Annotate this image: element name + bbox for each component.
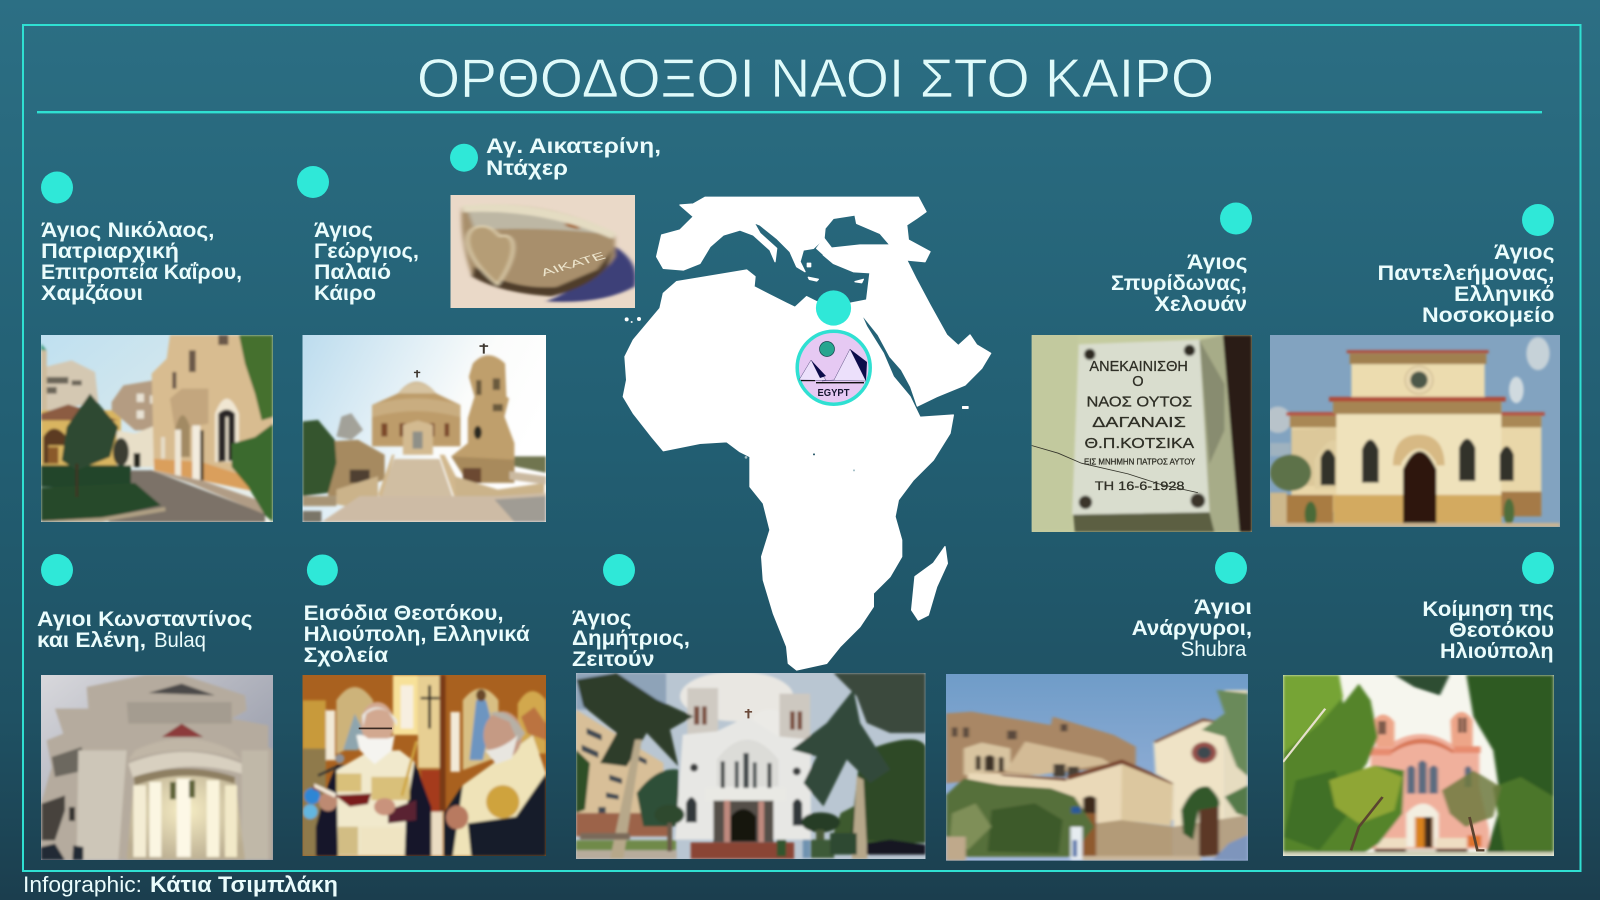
label: Agia Aikaterini: Ντάχερ	[486, 157, 568, 180]
icon: Egypt badge: EGYPT	[818, 388, 850, 399]
label: Koimisi Theotokou: Θεοτόκου	[1449, 619, 1554, 642]
label: Agios Spyridon	[1111, 251, 1248, 316]
label: Agios Georgios: Κάιρο	[314, 282, 376, 305]
label: Agios Nikolaos	[41, 219, 242, 305]
footer credit: Κάτια Τσιμπλάκη	[150, 872, 338, 897]
label: Koimisi Theotokou	[1422, 598, 1554, 663]
label: Agios Georgios	[314, 219, 419, 305]
label: Agios Nikolaos: Χαμζάουι	[41, 282, 143, 305]
label: Agios Panteleimon	[1378, 241, 1555, 327]
map: Africa and surroundings	[623, 197, 991, 670]
map marker dot	[816, 290, 851, 326]
label: Agios Nikolaos: Επιτροπεία Καΐρου,	[41, 261, 242, 284]
label: Agios Georgios: Παλαιό	[314, 261, 391, 284]
label: Agioi Anargyroi: Άγιοι	[1194, 596, 1252, 619]
marker: Agios Spyridon	[1220, 202, 1252, 234]
photo: plaque: ΑΝΕΚΑΙΝΙΣΘΗ	[1089, 359, 1188, 375]
photo: plaque: Θ.Π.ΚΟΤΣΙΚΑ	[1084, 436, 1194, 452]
label: Eisodia Theotokou: Σχολεία	[304, 644, 388, 667]
label: Agios Panteleimon: Παντελεήμονας,	[1378, 262, 1554, 285]
label: Agioi Konstantinos: Αγιοι Κωνσταντίνος	[37, 608, 253, 631]
label: Agios Spyridon: Σπυρίδωνας,	[1111, 272, 1247, 295]
photo: ring: ΑΙΚΑΤΕ	[538, 249, 608, 278]
label: Agios Dimitrios	[572, 607, 690, 671]
marker: Agios Nikolaos	[41, 172, 73, 204]
label: Eisodia Theotokou: Εισόδια Θεοτόκου,	[304, 602, 504, 625]
photo: plaque: ΔΑΓΑΝΑΙΣ	[1092, 415, 1186, 431]
icon: Egypt badge	[797, 331, 870, 404]
label: Agios Nikolaos: Πατριαρχική	[41, 240, 179, 263]
label: Agios Dimitrios: Άγιος	[572, 607, 632, 630]
label: Agios Nikolaos: Άγιος Νικόλαος,	[41, 219, 214, 242]
photo: plaque: ΤΗ 16-6-1928	[1095, 479, 1185, 493]
photo: Koimisi Theotokou	[1283, 675, 1554, 856]
photo: Agios Nikolaos	[41, 335, 273, 522]
label: Koimisi Theotokou: Ηλιούπολη	[1440, 640, 1554, 663]
photo: plaque: Ο	[1132, 374, 1144, 390]
label: Agioi Konstantinos: Bulaq	[154, 629, 206, 652]
label: Agios Panteleimon: Ελληνικό	[1454, 283, 1554, 306]
label: Agios Spyridon: Χελουάν	[1155, 293, 1247, 316]
marker: Koimisi	[1522, 552, 1554, 584]
label: Agios Georgios: Γεώργιος,	[314, 240, 419, 263]
footer credit: Infographic:	[23, 872, 142, 897]
label: Agioi Konstantinos: και Ελένη,	[37, 629, 146, 652]
photo: Eisodia Theotokou	[302, 675, 546, 856]
label: Agios Panteleimon: Νοσοκομείο	[1422, 304, 1554, 327]
marker: Agioi Anargyroi	[1215, 552, 1247, 584]
label: Agioi Anargyroi: Ανάργυροι,	[1132, 617, 1252, 640]
label: Agioi Anargyroi: Shubra	[1181, 638, 1247, 661]
marker: Agia Aikaterini	[450, 144, 478, 172]
photo: Agios Panteleimon	[1270, 335, 1560, 527]
label: Agia Aikaterini: Αγ. Αικατερίνη,	[486, 135, 661, 158]
label: Eisodia Theotokou: Ηλιούπολη, Ελληνικά	[304, 623, 530, 646]
photo: Agioi Anargyroi	[946, 674, 1248, 861]
label: Agios Dimitrios: Δημήτριος,	[572, 627, 690, 650]
photo: Agioi Konstantinos	[41, 675, 273, 860]
marker: Agioi Konstantinos	[41, 554, 73, 586]
label: Eisodia Theotokou	[304, 602, 530, 667]
label: Agios Panteleimon: Άγιος	[1494, 241, 1555, 264]
photo: Agios Dimitrios	[576, 673, 926, 859]
label: Koimisi Theotokou: Κοίμηση της	[1422, 598, 1554, 621]
photo: plaque	[1032, 335, 1252, 532]
label: Agioi Konstantinos	[37, 608, 253, 652]
title underline	[37, 111, 1542, 113]
label: Agios Dimitrios: Ζειτούν	[572, 648, 654, 671]
marker: Agios Georgios	[297, 166, 329, 198]
marker: Eisodia Theotokou	[307, 554, 338, 586]
photo: Agios Georgios	[302, 335, 546, 522]
label: Agios Georgios: Άγιος	[314, 219, 373, 242]
photo: plaque: ΝΑΟΣ ΟΥΤΟΣ	[1086, 394, 1192, 410]
marker: Agios Dimitrios	[603, 554, 635, 586]
marker: Agios Panteleimon	[1522, 204, 1554, 236]
label: Agios Spyridon: Άγιος	[1187, 251, 1248, 274]
photo: ring	[450, 195, 635, 308]
label: Agioi Anargyroi	[1132, 596, 1252, 661]
label: Agia Aikaterini	[486, 135, 661, 180]
title: ΟΡΘΟΔΟΞΟΙ ΝΑΟΙ ΣΤΟ ΚΑΙΡΟ	[417, 47, 1214, 109]
footer credit	[23, 872, 338, 897]
photo: plaque: ΕΙΣ ΜΝΗΜΗΝ ΠΑΤΡΟΣ ΑΥΤΟΥ	[1084, 458, 1196, 467]
